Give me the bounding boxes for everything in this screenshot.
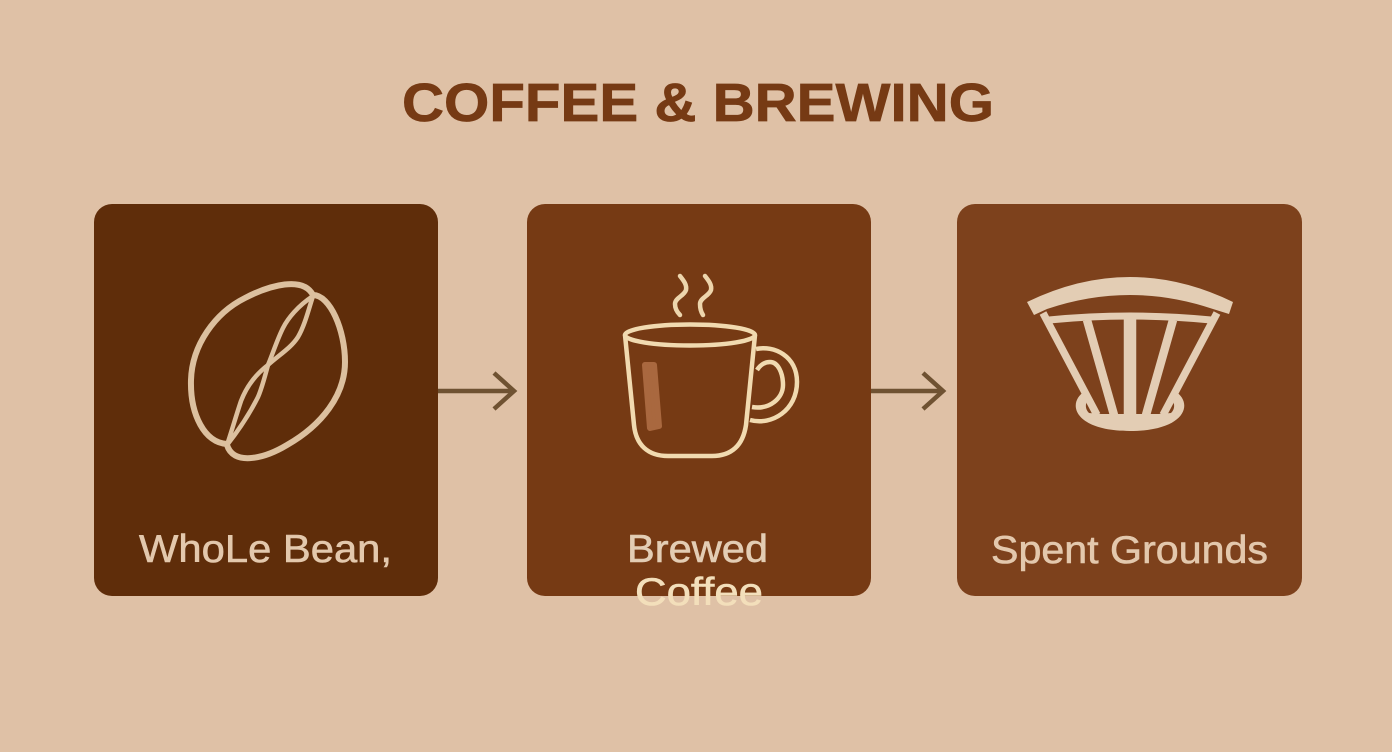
arrow: coffee to grounds (871, 373, 943, 409)
icon: steam (675, 276, 711, 315)
title: COFFEE & BREWING (402, 73, 994, 133)
icon: coffee cup (625, 324, 797, 456)
panel: spent grounds (957, 204, 1302, 596)
arrow: bean to coffee (438, 373, 514, 409)
icon: coffee filter (1027, 277, 1233, 431)
panel: whole bean (94, 204, 438, 596)
label: brewed: Brewed (627, 528, 768, 571)
label: coffee: Coffee (635, 571, 763, 614)
label: spent grounds: Spent Grounds (991, 529, 1268, 572)
panel: brewed coffee (527, 204, 871, 614)
icon: coffee bean (191, 284, 345, 458)
label: whole bean: WhoLe Bean, (139, 528, 392, 571)
